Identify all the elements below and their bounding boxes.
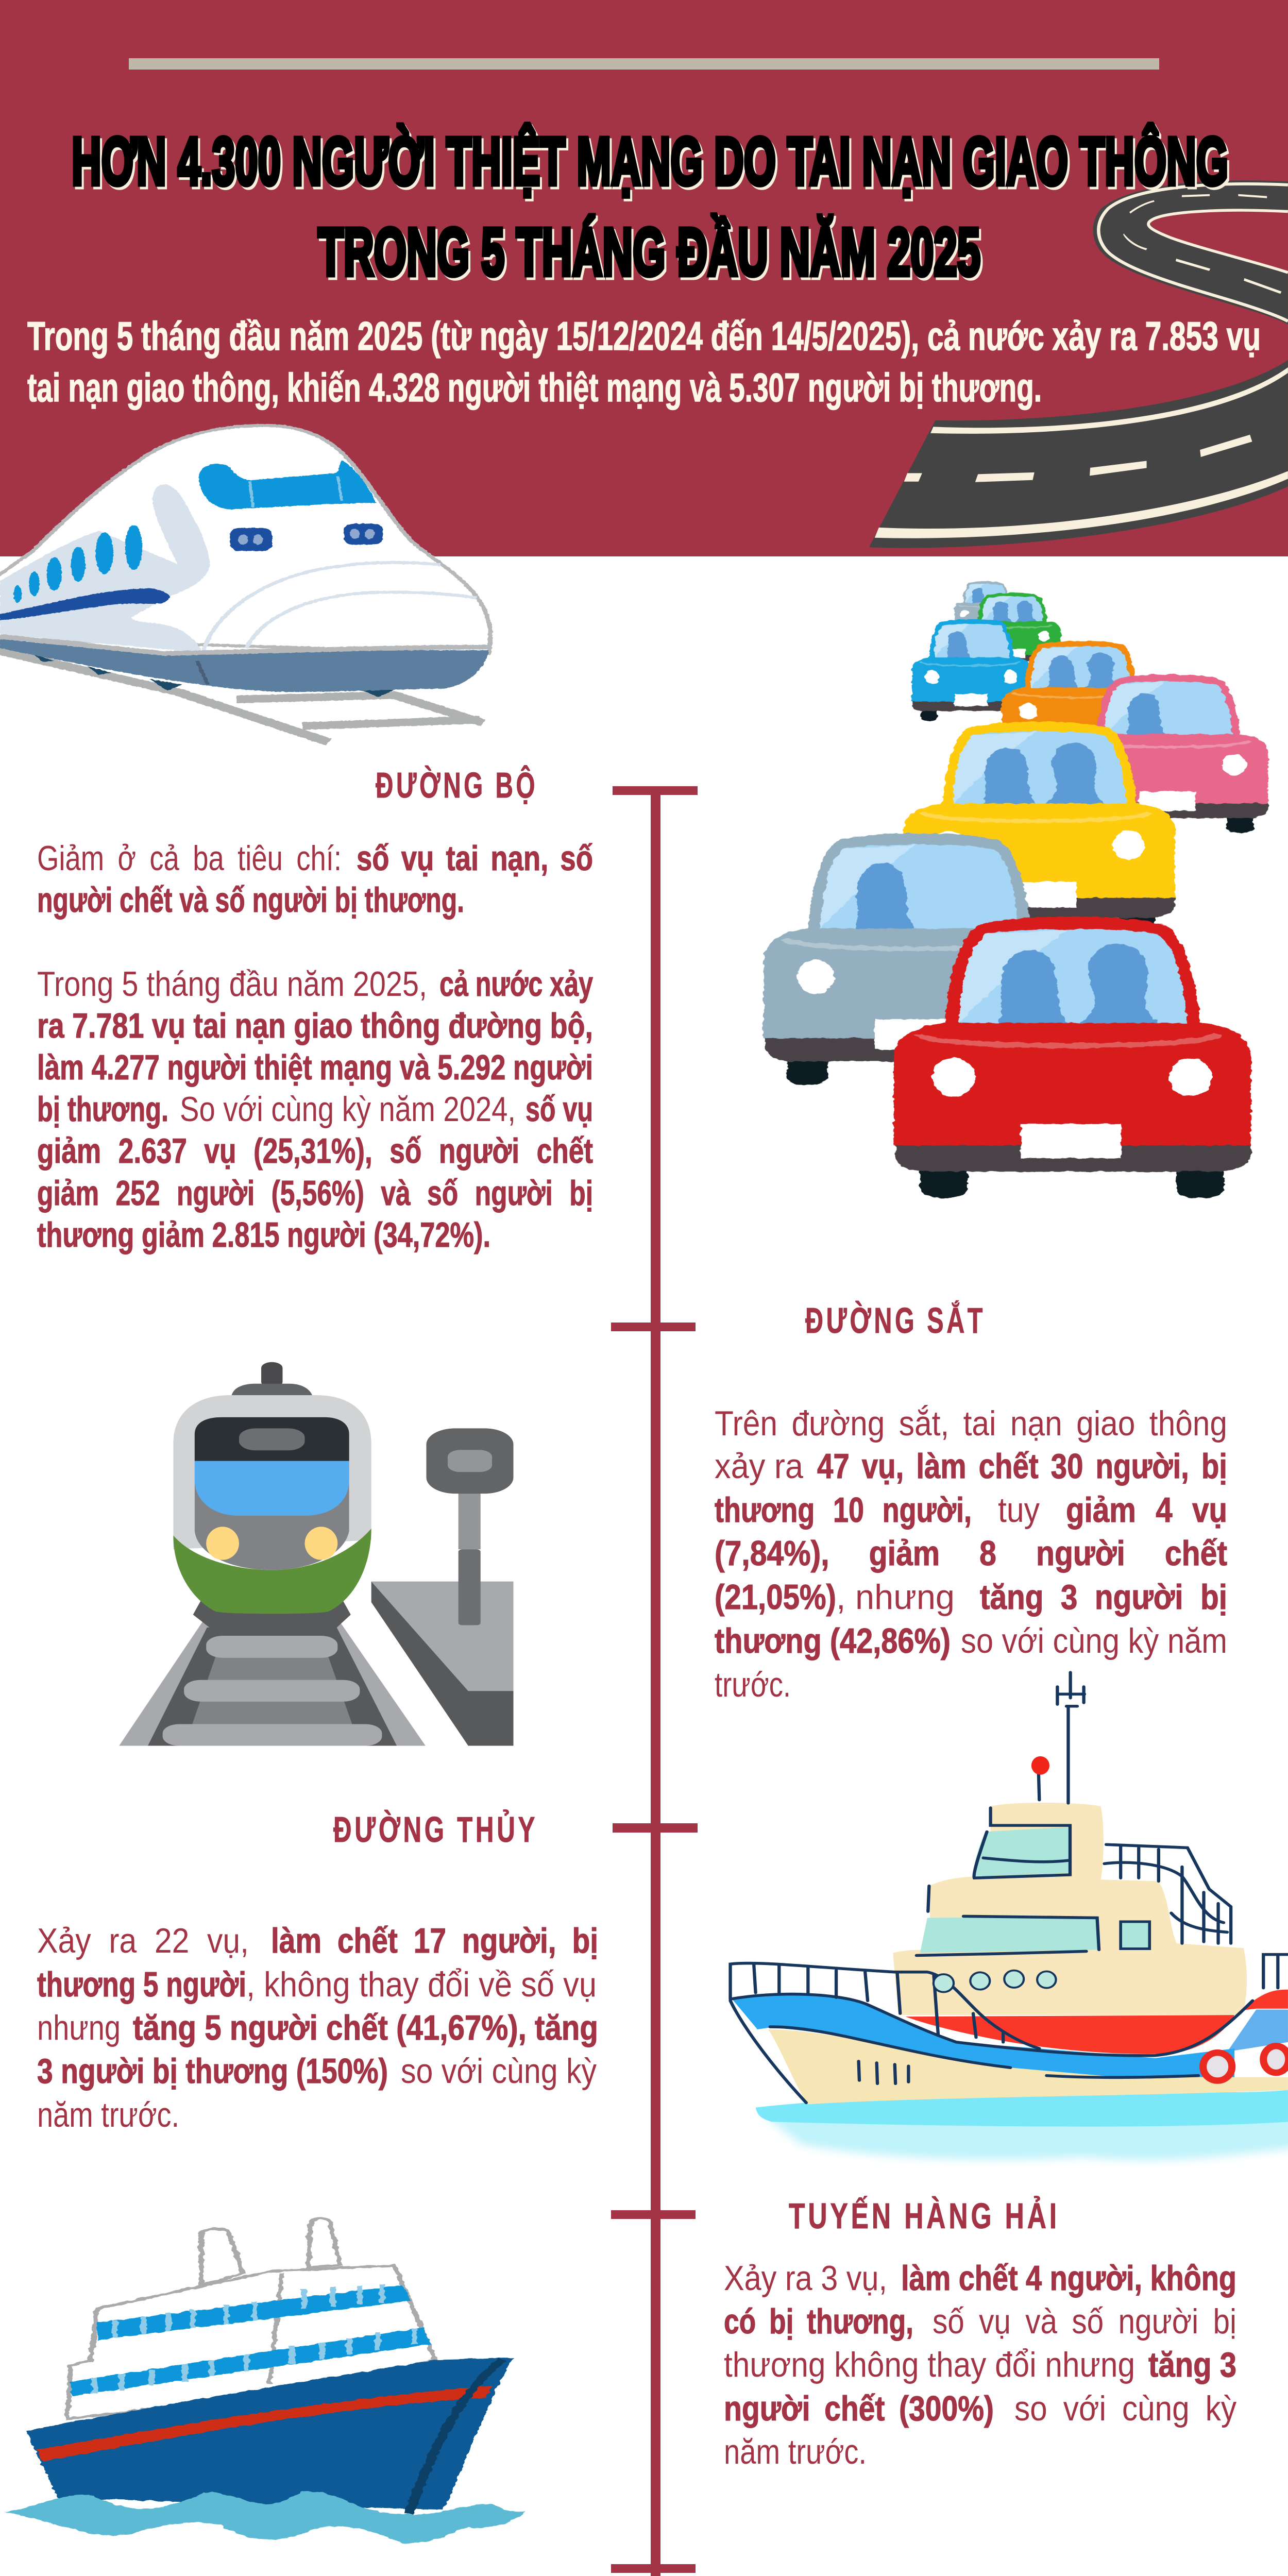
text block: tuyến hàng hải: người chết (300%) [724, 2389, 994, 2428]
top decorative bar [129, 58, 1159, 70]
orange car [1002, 641, 1159, 765]
text block: đường sắt: tăng 3 người bị [980, 1578, 1227, 1617]
heading: tuyến hàng hải: TUYẾN HÀNG HẢI [789, 2196, 1060, 2236]
header band [0, 0, 1288, 556]
red car [894, 917, 1251, 1198]
text block: đường bộ: thương giảm 2.815 người (34,72%). [37, 1215, 490, 1255]
text block: đường thủy: , không thay đổi về số vụ [246, 1965, 597, 2004]
text block: đường sắt: Trên đường sắt, tai nạn giao thông [715, 1404, 1227, 1443]
intro text [27, 313, 1261, 410]
waves [4, 2492, 526, 2544]
text block: đường thủy: thương 5 người [37, 1965, 246, 2004]
grey car [764, 833, 1074, 1085]
text block: đường bộ [37, 839, 593, 1255]
life rings [1203, 2046, 1288, 2081]
cabin [893, 1803, 1247, 2015]
yellow car [904, 722, 1175, 938]
text block: đường sắt: so với cùng kỳ năm [961, 1621, 1227, 1660]
text block: đường bộ: số vụ [526, 1090, 593, 1129]
text block: đường thủy: tăng 5 người chết (41,67%), tăng [133, 2008, 598, 2047]
text block: đường bộ: làm 4.277 người thiệt mạng và 5.292 người [37, 1048, 593, 1087]
text block: tuyến hàng hải: thương không thay đổi nhưng [724, 2345, 1135, 2384]
train [173, 1362, 371, 1628]
text block: đường bộ: người chết và số người bị thương. [37, 880, 464, 920]
superstructure [67, 2265, 435, 2419]
hull red [906, 2015, 1234, 2054]
track [119, 1612, 426, 1745]
hull [26, 2358, 513, 2510]
icon: cruise ship [4, 2218, 526, 2544]
railings and dark lines [731, 1672, 1288, 2103]
heading: đường bộ: ĐƯỜNG BỘ [376, 765, 538, 805]
funnels [201, 2218, 340, 2285]
heading: đường thủy: ĐƯỜNG THỦY [333, 1809, 538, 1850]
portholes [934, 1971, 1056, 1992]
red signal light [1031, 1756, 1049, 1775]
text block: đường sắt: (21,05%) [715, 1578, 836, 1617]
text block: đường thủy: làm chết 17 người, bị [271, 1921, 598, 1960]
text block: đường bộ: số vụ tai nạn, số [357, 839, 593, 878]
section: đường sắt [715, 1300, 1227, 1704]
text block: đường bộ: bị thương. [37, 1090, 168, 1129]
text block: tuyến hàng hải: có bị thương, [724, 2302, 913, 2341]
signal [426, 1428, 513, 1625]
platform [371, 1582, 513, 1745]
section: đường bộ [37, 765, 593, 1255]
icon: winding road [869, 180, 1288, 548]
section: tuyến hàng hải [724, 2196, 1236, 2471]
text block: đường sắt: thương 10 người, [715, 1490, 972, 1530]
small grey car [954, 581, 1018, 637]
text block: đường bộ: Giảm ở cả ba tiêu chí: [37, 839, 342, 878]
icon: tugboat [731, 1672, 1288, 2160]
text block: đường sắt: giảm 4 vụ [1066, 1490, 1227, 1530]
text block: đường sắt [715, 1404, 1227, 1704]
timeline [611, 786, 702, 2576]
text block: đường sắt: tuy [998, 1490, 1040, 1530]
text block: đường sắt: xảy ra [715, 1447, 803, 1486]
text block: đường sắt: trước. [715, 1665, 791, 1704]
icon: bullet train [0, 426, 490, 742]
icon: metro train at signal [119, 1362, 514, 1745]
text block: đường bộ: cả nước xảy [439, 964, 593, 1004]
text block: đường bộ: Trong 5 tháng đầu năm 2025, [37, 964, 427, 1004]
rails [0, 650, 483, 742]
text block: đường bộ: giảm 252 người (5,56%) và số người bị [37, 1174, 593, 1213]
text block: đường sắt: thương (42,86%) [715, 1621, 951, 1660]
hull blue [732, 1994, 1234, 2077]
train body [0, 426, 490, 653]
title [72, 123, 1230, 292]
red stripe [37, 2385, 493, 2462]
blue car [912, 619, 1031, 721]
text block: đường bộ: giảm 2.637 vụ (25,31%), số người chết [37, 1131, 593, 1171]
text block: tuyến hàng hải: số vụ và số người bị [933, 2302, 1236, 2341]
text block: tuyến hàng hải [724, 2259, 1236, 2471]
section: đường thủy [37, 1809, 598, 2134]
pink car [1068, 674, 1268, 833]
window stripes [70, 2285, 431, 2396]
text block: tuyến hàng hải: Xảy ra 3 vụ, [724, 2259, 887, 2298]
heading: đường sắt: ĐƯỜNG SẮT [805, 1300, 986, 1341]
text block: tuyến hàng hải: tăng 3 [1148, 2345, 1236, 2384]
icon: car queue [764, 581, 1268, 1198]
text block: đường bộ: ra 7.781 vụ tai nạn giao thông đường bộ, [37, 1006, 593, 1045]
text block: tuyến hàng hải: năm trước. [724, 2432, 867, 2471]
green car [964, 593, 1061, 669]
text block: đường thủy: nhưng [37, 2008, 121, 2047]
text block: đường thủy: Xảy ra 22 vụ, [37, 1921, 249, 1960]
text block: đường bộ: So với cùng kỳ năm 2024, [180, 1090, 516, 1129]
title line 2 [318, 214, 982, 292]
text block: đường thủy [37, 1921, 598, 2134]
text block: đường sắt: , nhưng [836, 1578, 955, 1617]
text block: đường thủy: 3 người bị thương (150%) [37, 2052, 388, 2091]
text block: đường thủy: năm trước. [37, 2095, 179, 2134]
text block: tuyến hàng hải: so với cùng kỳ [1014, 2389, 1236, 2428]
text block: đường thủy: so với cùng kỳ [401, 2052, 597, 2091]
